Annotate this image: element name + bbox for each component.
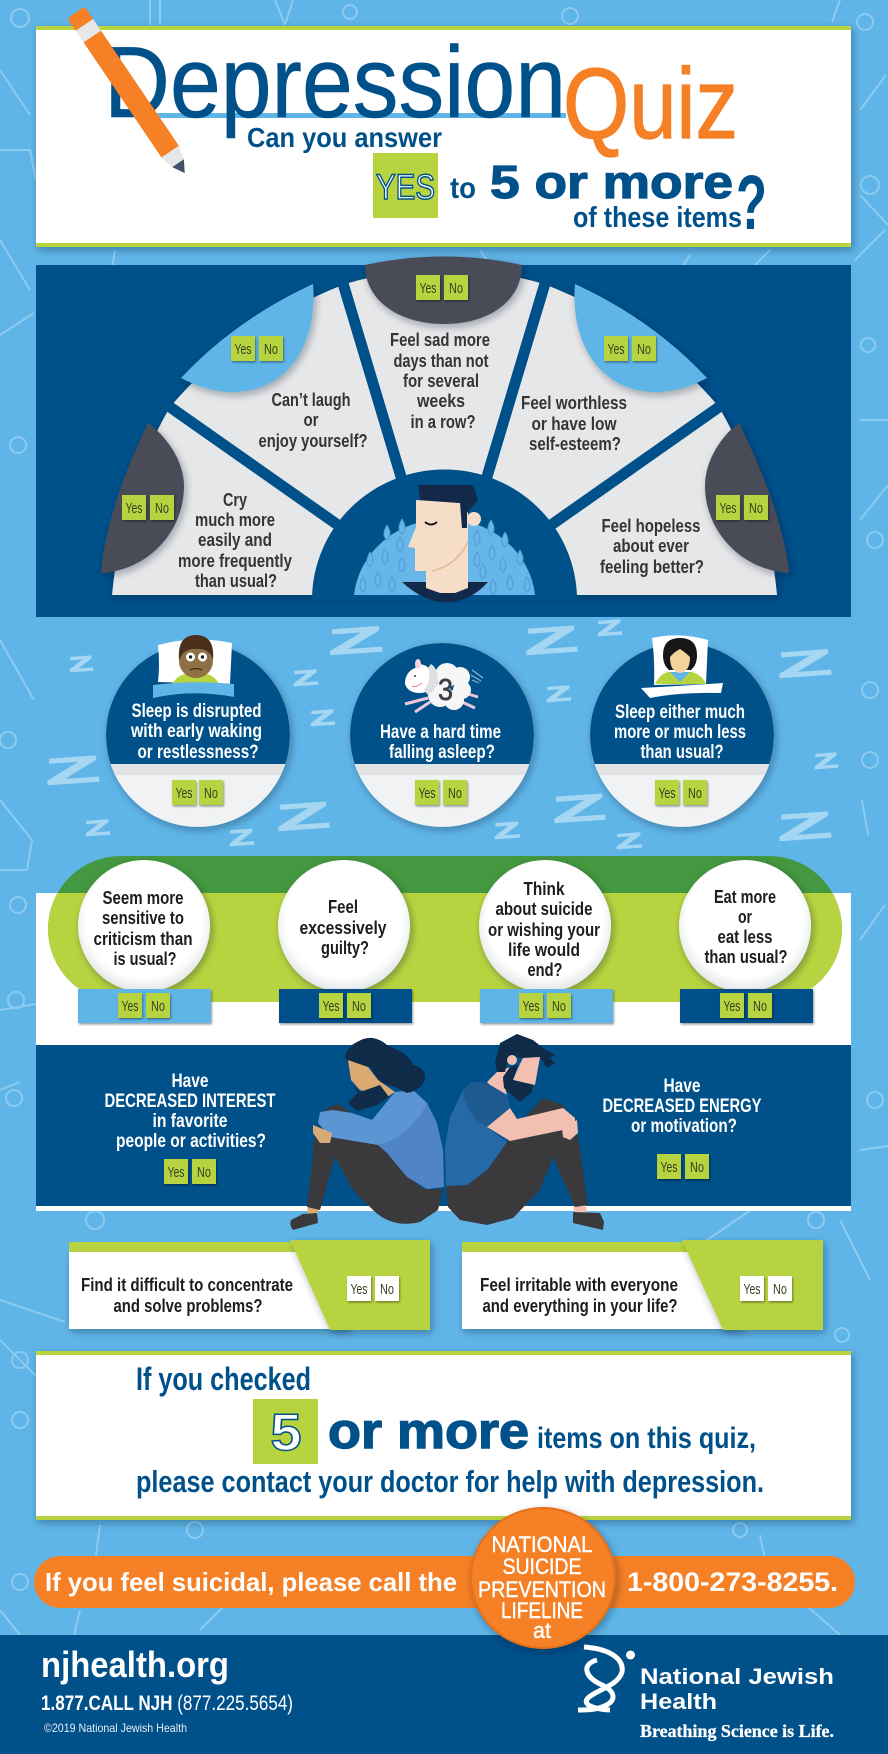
badge: 5 [253,1399,318,1464]
panel: irritable: and everything in your life? [482,1295,678,1316]
panel: irritable [462,1240,823,1330]
question: criticism: No [151,998,165,1015]
dark leaf left [101,423,184,573]
yes no: interest [164,1159,216,1184]
text: decreased interest: people or activities? [116,1131,266,1152]
question: suicide: Yes [522,998,540,1015]
yes no: Yes [176,785,192,802]
yes no: No [448,785,462,802]
decorative sleep letters: Z [84,816,111,841]
text: wedge questions: Can’t laugh [272,390,350,410]
text: decreased energy: or motivation? [631,1116,737,1137]
badge: yes: YES [376,168,435,207]
yes no: laugh: Yes [234,341,252,358]
dark leaf right [705,423,789,573]
question: guilty: guilty? [321,937,369,958]
question: eating: Yes [724,998,740,1015]
text: more or much less [614,722,746,743]
text: decreased interest: Have [172,1071,208,1092]
yes no: worthless: Yes [608,341,624,358]
footer [0,1635,888,1754]
subheading: can you answer: Can you answer [247,122,442,153]
yes no [655,780,707,805]
yes no: hopeless: Yes [720,500,736,517]
panel: conclusion: If you checked [136,1361,311,1397]
text: wedge questions: in a row? [410,412,476,432]
yes no: cry: Yes [126,500,142,517]
panel: header [36,7,851,247]
decorative sleep letters: Z [596,616,623,641]
question: eating: than usual? [704,946,788,967]
yes no: energy: Yes [660,1159,678,1176]
light leaf left [181,284,314,392]
yes no: hopeless: No [749,500,763,517]
yes no: Yes [350,1281,368,1298]
panel: sleep much more or less [590,635,774,827]
question: eating: eat less [718,926,772,947]
text: with early waking [130,721,262,742]
question: criticism: Seem more [102,887,184,908]
text [380,722,501,763]
yes no: Yes [744,1281,760,1298]
question: eating: Eat more [714,886,776,907]
text: wedge questions: days than not [394,351,488,371]
panel: conclusion: or more [328,1403,529,1459]
text [130,701,262,763]
subheading: to 5 or more: of these items [573,202,742,234]
text: wedge questions: Feel worthless [521,393,627,413]
center ring [312,470,577,600]
decorative sleep letters: Z [68,652,94,677]
panel: decreased interest and energy [36,1045,851,1206]
text: Sleep is disrupted [132,701,262,722]
footer: njhealth.org [41,1644,229,1685]
panel: irritable: Feel irritable with everyone [480,1274,678,1295]
footer: Health [640,1689,717,1714]
question: suicide [479,860,613,1023]
icon: man in bed [153,635,234,698]
yes no: laugh [231,336,283,361]
decorative sleep letters: Z [309,706,336,731]
badge: national suicide prevention lifeline: SUICIDE [502,1554,582,1579]
icon: sheep: 3 [438,672,453,707]
decorative sleep letters: Z [292,666,319,691]
decorative sleep letters: Z [493,817,521,844]
figure: woman [290,1038,444,1230]
yes no: No [773,1281,787,1298]
yes no: energy: No [690,1159,704,1176]
text: than usual? [640,742,724,763]
yes no [740,1276,792,1301]
subheading: to 5 or more: 5 or more [490,156,733,208]
footer: 1.877.CALL NJH (877.225.5654) [41,1692,293,1715]
badge: national suicide prevention lifeline: NATIONAL [492,1532,592,1557]
yes no: feel sad [416,275,468,300]
fan wedges [112,270,777,595]
text: wedge questions: than usual? [195,571,277,591]
badge: national suicide prevention lifeline: LIFELINE [501,1598,583,1623]
icon: pencil [67,7,193,179]
badge: national suicide prevention lifeline: at [533,1618,551,1643]
yes no: interest: Yes [168,1164,184,1181]
panel: conclusion: items on this quiz, [537,1422,756,1455]
question: eating: or [738,906,752,927]
text: wedge questions: or have low [532,414,617,434]
panel: conclusion: please contact your doctor for help with depression. [136,1464,764,1499]
question: guilty: No [352,998,366,1015]
band bottom white edge [36,1206,851,1211]
question: suicide: Think [524,878,565,899]
panel: hard time falling asleep [350,643,534,827]
text: wedge questions: Cry [223,490,247,510]
text: wedge questions: more frequently [178,551,292,571]
text: decreased interest: DECREASED INTEREST [104,1091,276,1112]
decorative sleep letters: Z [545,682,572,707]
icon: woman in bed [641,635,723,698]
question: criticism [78,860,211,1023]
text: wedge questions: Feel sad more [390,330,490,350]
text: wedge questions: about ever [613,536,689,556]
illustration: sad couple back to back [290,1034,604,1230]
light leaf right [574,284,707,392]
yes no: Yes [658,785,676,802]
text: decreased interest [104,1071,276,1152]
dark cap top [365,256,522,324]
yes no: feel sad: No [449,280,463,297]
figure: man [445,1034,604,1230]
question: criticism: Yes [122,998,138,1015]
text: decreased energy: DECREASED ENERGY [602,1096,762,1117]
callout: lifeline bar: If you feel suicidal, please call the [45,1567,457,1597]
yes no: worthless [604,336,656,361]
text: Sleep either much [615,702,745,723]
text: or restlessness? [138,742,258,763]
text: wedge questions: for several [403,371,479,391]
decorative sleep letters: Z [615,829,643,854]
badge: 5: 5 [270,1404,302,1462]
question: suicide: about suicide [496,898,592,919]
panel: concentrate: Find it difficult to concentrate [81,1274,293,1295]
text: wedge questions: weeks [416,391,465,411]
subheading: to 5 or more: ? [736,160,767,246]
yes no: energy [657,1154,709,1179]
text: wedge questions: easily and [198,530,272,550]
panel: green band [36,856,851,1045]
question: criticism: is usual? [114,948,176,969]
callout: lifeline bar: 1-800-273-8255. [627,1567,838,1597]
text: wedge questions: feeling better? [600,557,704,577]
decorative sleep letters: Z [551,786,607,831]
panel: sleep disrupted [106,635,290,827]
decorative sleep letters: Z [44,748,101,793]
question: eating: No [753,998,767,1015]
title: Depression: Depression [104,27,566,139]
question: suicide: or wishing your [488,919,600,940]
decorative sleep letters: Z [327,618,384,663]
text: wedge questions: enjoy yourself? [258,431,368,451]
logo [578,1647,635,1710]
yes no [347,1276,399,1301]
yes no: Yes [418,785,436,802]
question: guilty: Feel [328,896,358,917]
title: Quiz: Quiz [563,48,738,160]
badge: yes [373,153,438,218]
footer: National Jewish [640,1664,834,1689]
text: falling asleep? [389,742,495,763]
decorative sleep letters: Z [776,641,833,686]
text: wedge questions: or [304,410,318,430]
icon: sheep [405,659,483,712]
yes no: hopeless [716,495,768,520]
callout: lifeline bar [34,1508,855,1648]
decorative sleep letters: Z [776,804,833,849]
text: wedge questions: much more [195,510,275,530]
footer: ©2019 National Jewish Health [44,1721,187,1735]
text: decreased energy [602,1076,762,1137]
subheading: to 5 or more [450,156,767,246]
text [614,702,746,763]
decorative sleep letters [44,616,839,854]
question: eating [679,860,813,1023]
yes no: cry: No [155,500,169,517]
yes no [415,780,467,805]
panel: concentrate [69,1240,430,1330]
question: suicide: life would [508,939,580,960]
badge: national suicide prevention lifeline [471,1508,615,1648]
yes no: laugh: No [264,341,278,358]
text: wedge questions [178,330,704,591]
question: guilty [278,860,412,1023]
yes no: interest: No [197,1164,211,1181]
text: wedge questions: Feel hopeless [602,516,700,536]
yes no: No [204,785,218,802]
yes no: feel sad: Yes [420,280,436,297]
question: suicide: end? [528,959,562,980]
icon: sad face [360,485,530,602]
decorative sleep letters: Z [813,749,839,774]
question: guilty: Yes [322,998,340,1015]
yes no [172,780,223,805]
decorative sleep letters: Z [228,824,255,851]
question: criticism: criticism than [94,928,192,949]
text: decreased interest: in favorite [152,1111,228,1132]
decorative sleep letters: Z [275,794,331,839]
decorative sleep letters: Z [523,618,579,663]
question: guilty: excessively [300,917,387,938]
yes no: worthless: No [637,341,651,358]
question: suicide: No [552,998,566,1015]
badge: national suicide prevention lifeline: PREVENTION [478,1577,606,1602]
text: Have a hard time [380,722,501,743]
footer: Breathing Science is Life. [640,1721,834,1741]
text: decreased energy: Have [664,1076,700,1097]
panel: concentrate: and solve problems? [114,1295,262,1316]
question: criticism: sensitive to [102,907,184,928]
subheading: to 5 or more: to [450,172,476,205]
yes no: cry [122,495,174,520]
panel: conclusion [36,1351,851,1520]
text: wedge questions: self-esteem? [529,434,621,454]
yes no: No [380,1281,394,1298]
yes no: No [688,785,702,802]
panel: semicircle quiz [36,256,851,617]
